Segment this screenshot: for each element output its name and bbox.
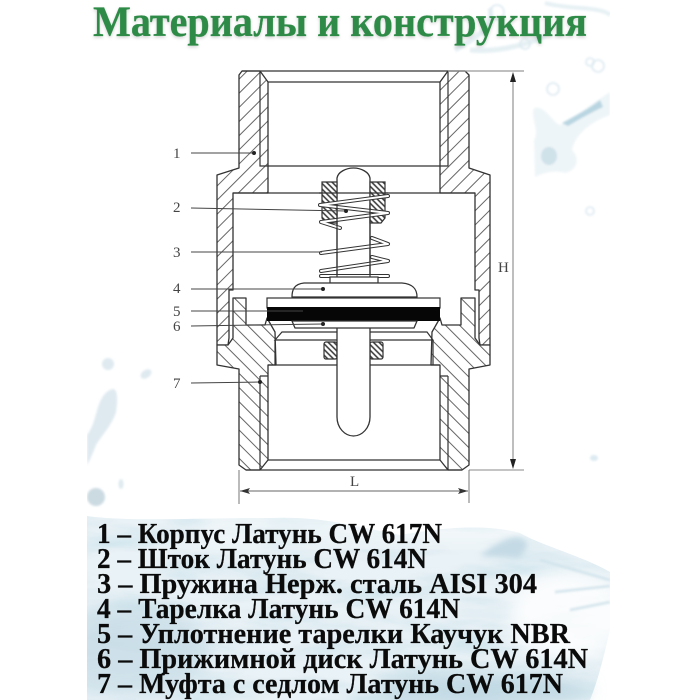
water surface behind the legend	[50, 516, 630, 700]
dimension: H: H	[498, 260, 509, 276]
legend item 2: 2 – Шток Латунь CW 614N	[97, 544, 427, 575]
callout 5: 5	[173, 304, 180, 320]
callout 1	[173, 146, 256, 162]
valve plate	[267, 277, 440, 328]
rubber seal	[267, 307, 440, 321]
splash: left side droplets	[87, 358, 153, 506]
callout 4: 4	[173, 281, 181, 297]
valve body: upper left wall	[217, 71, 268, 345]
legend item 5: 5 – Уплотнение тарелки Каучук NBR	[97, 619, 571, 650]
lower bore	[246, 365, 462, 470]
callout 6: 6	[173, 319, 181, 335]
callout 5	[173, 304, 303, 320]
spring	[320, 196, 388, 290]
splash: right side stream	[533, 92, 610, 461]
dimension: L	[239, 470, 469, 504]
callout 7	[173, 376, 262, 392]
legend item 1: 1 – Корпус Латунь CW 617N	[97, 519, 442, 550]
pressure disc	[292, 321, 417, 328]
valve body: upper threads	[233, 71, 475, 193]
legend item 6: 6 – Прижимной диск Латунь CW 614N	[97, 644, 588, 675]
seat inner chamfer	[275, 332, 433, 365]
technical drawing: check valve section	[173, 71, 524, 504]
callout 1: 1	[173, 146, 180, 162]
splash: top right droplets	[455, 3, 610, 215]
valve seat coupling: lower left	[217, 298, 276, 470]
valve body: upper right wall	[440, 71, 490, 345]
lower guide nuts	[324, 342, 383, 359]
callout 7: 7	[173, 376, 181, 392]
title: Материалы и конструкция	[93, 0, 587, 46]
stem	[337, 168, 370, 436]
valve seat coupling: lower right	[431, 298, 490, 470]
dimension: L: L	[350, 474, 359, 490]
dimension: H	[448, 71, 524, 470]
legend item 3: 3 – Пружина Нерж. сталь AISI 304	[97, 569, 537, 600]
upper guide nuts	[319, 182, 388, 223]
callout 6	[173, 319, 325, 335]
legend item 7: 7 – Муфта с седлом Латунь CW 617N	[97, 669, 563, 700]
callout 2	[173, 200, 348, 216]
legend: parts and materials	[97, 519, 588, 700]
callout 4	[173, 281, 325, 297]
legend item 4: 4 – Тарелка Латунь CW 614N	[97, 594, 460, 625]
callout 2: 2	[173, 200, 180, 216]
callout 3: 3	[173, 245, 180, 261]
